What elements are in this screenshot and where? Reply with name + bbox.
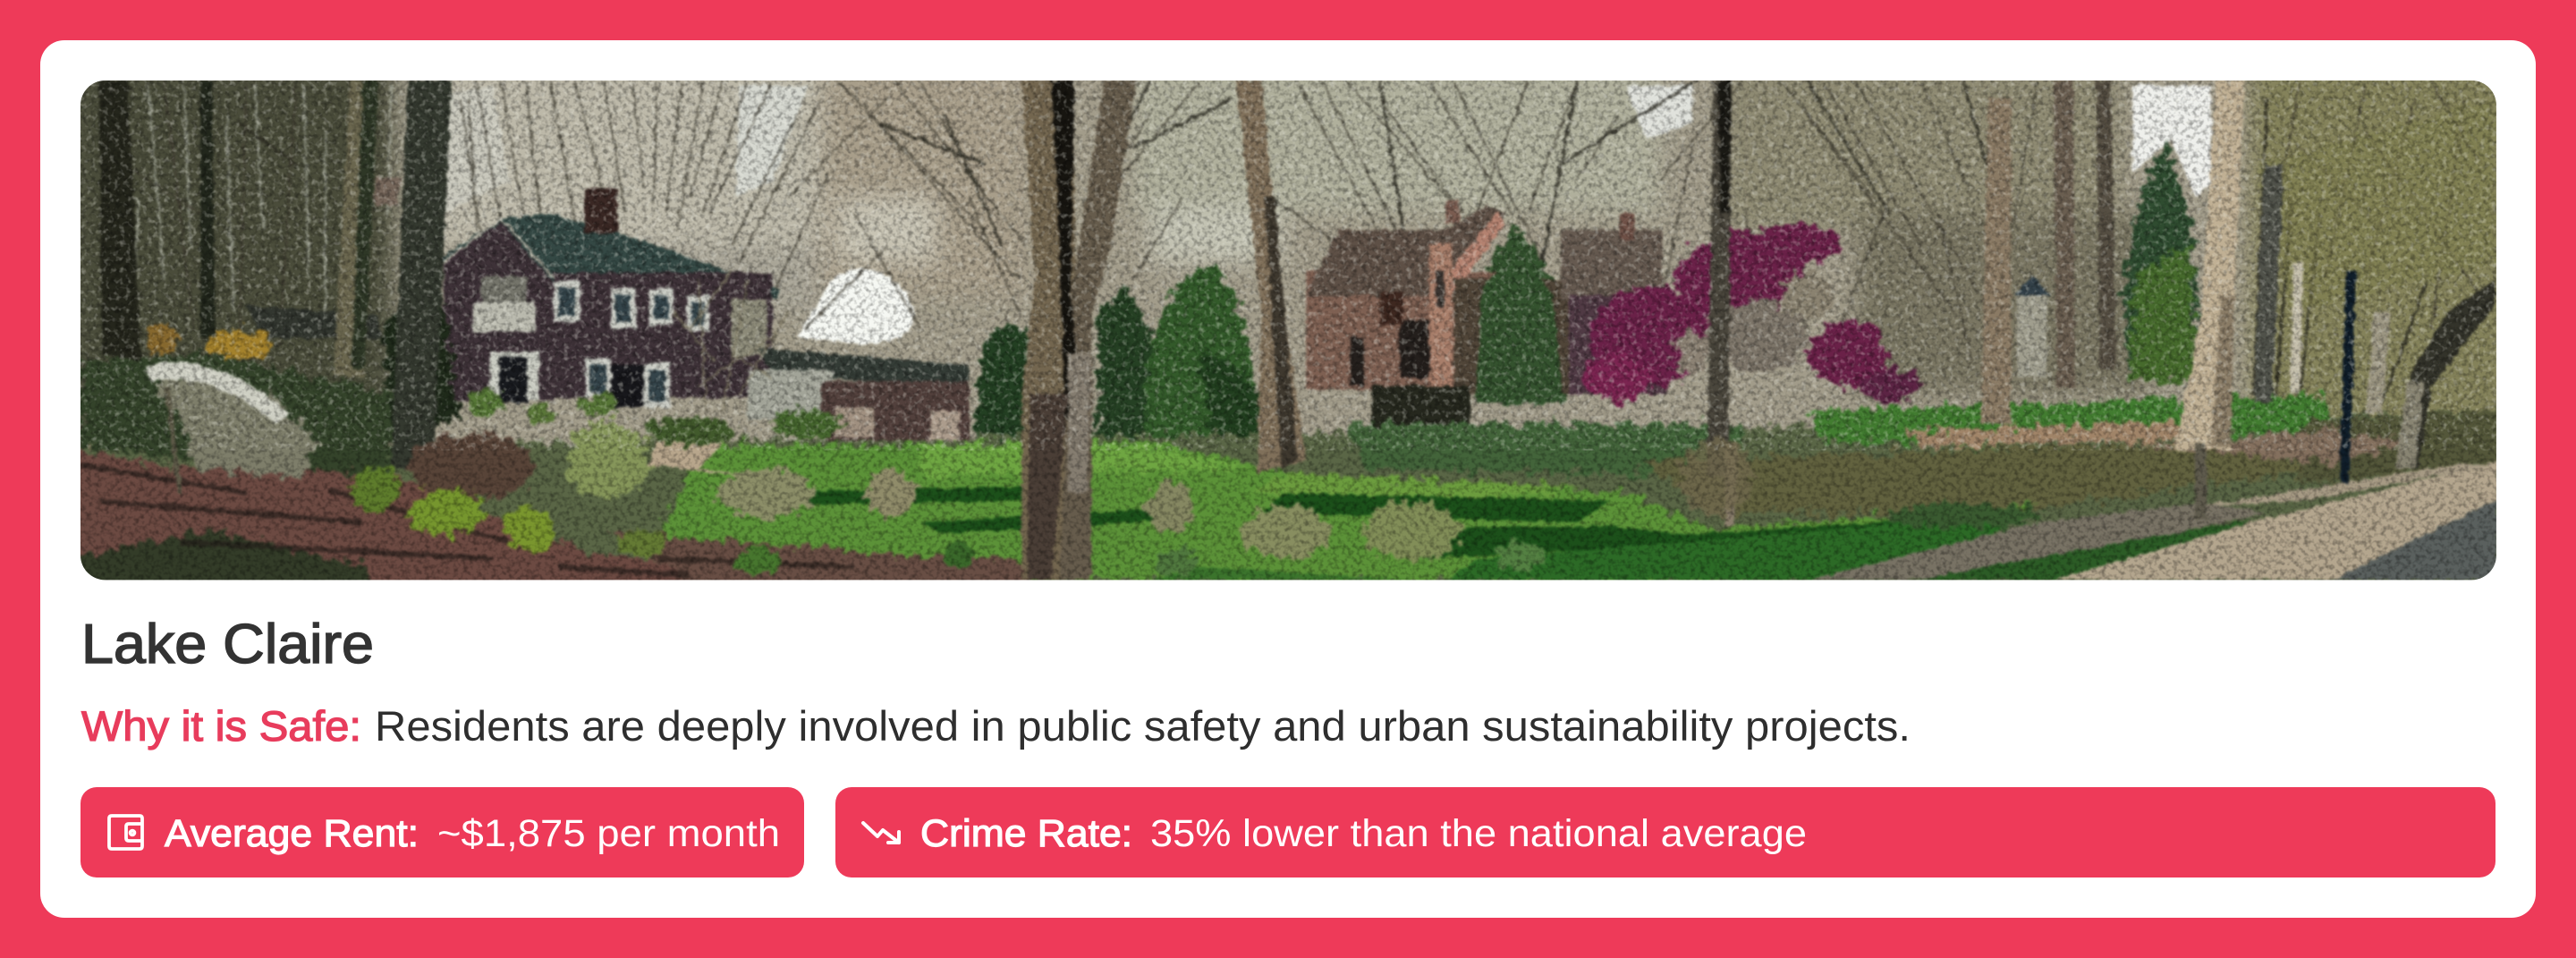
house one (247, 189, 970, 440)
mulch slope left (65, 447, 1027, 591)
value: rent: ~$1,875 per month (437, 812, 780, 855)
trunks (98, 81, 2496, 580)
thin branches (123, 82, 2480, 377)
icon: trending down arrow (863, 823, 899, 843)
main lawn (657, 440, 2038, 580)
icon: wallet (109, 816, 142, 849)
photo: Lake Claire neighborhood (65, 65, 2513, 591)
photo grain (80, 81, 2497, 580)
ground (65, 394, 2513, 591)
distant evergreen and dark foliage (972, 98, 2496, 444)
description (81, 702, 1911, 750)
value: crime rate: 35% lower than the national average (1150, 812, 1807, 855)
light slits in left woodland (135, 86, 391, 328)
tree in front of house one (674, 271, 789, 411)
label: average rent: Average Rent: (165, 812, 419, 855)
title: Lake Claire (81, 614, 374, 675)
stat pill: average rent (80, 787, 804, 877)
house two (1306, 200, 1667, 394)
label: why it is safe: Why it is Safe: (81, 702, 361, 750)
sidewalk and road (1807, 503, 2267, 580)
body text: Residents are deeply involved in public safety and urban sustainability projects. (375, 702, 1911, 750)
stat pill: crime rate (835, 787, 2496, 877)
foliage near house two (1474, 270, 1565, 405)
label: crime rate: Crime Rate: (920, 812, 1132, 855)
garden shrubs (350, 389, 2042, 577)
purple redbud (1582, 224, 1919, 403)
left woodland (80, 304, 460, 477)
